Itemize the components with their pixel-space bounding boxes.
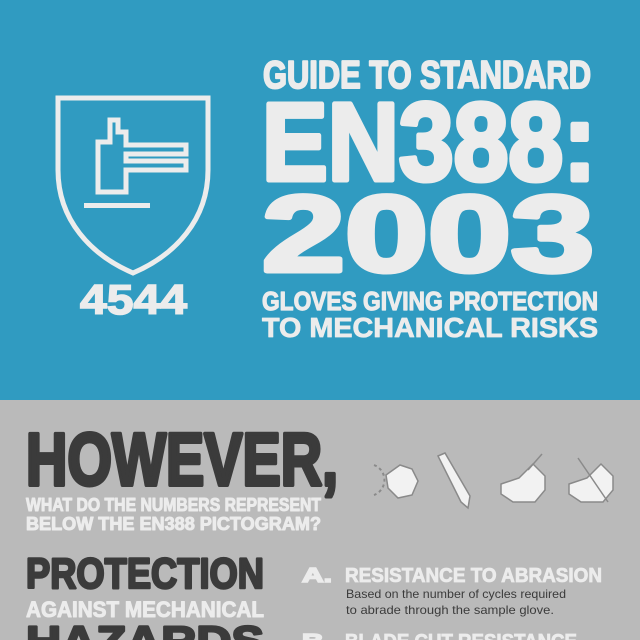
icons: hazards: [374, 453, 613, 508]
subtitle: TO MECHANICAL RISKS: [262, 312, 598, 343]
item A: abrasion: A.: [302, 565, 332, 587]
item A: abrasion: to abrade through the sample glove.: [346, 603, 554, 617]
heading: protection against mechanical hazards: AGAINST MECHANICAL: [26, 597, 264, 622]
icon: tear hand: [501, 454, 545, 502]
title: EN388:: [262, 81, 596, 204]
icon: abrasion fist: [374, 465, 418, 498]
icon: puncture hand: [569, 458, 613, 502]
heading: however: WHAT DO THE NUMBERS REPRESENT: [26, 495, 321, 515]
pictogram number: 4544: [80, 276, 188, 323]
heading: however: HOWEVER,: [26, 418, 338, 501]
title: [262, 54, 596, 294]
icon: blade: [438, 453, 470, 508]
title: 2003: [262, 173, 594, 294]
header panel: [0, 0, 640, 400]
heading: protection against mechanical hazards: [26, 550, 264, 640]
subtitle: GLOVES GIVING PROTECTION: [262, 286, 598, 316]
item A: abrasion: RESISTANCE TO ABRASION: [345, 565, 602, 587]
item A: abrasion: [302, 565, 602, 617]
subtitle: [262, 286, 598, 343]
icon: EN388 shield with fist and hammer: [58, 98, 208, 273]
heading: however: BELOW THE EN388 PICTOGRAM?: [26, 514, 321, 534]
heading: protection against mechanical hazards: PROTECTION: [26, 550, 264, 598]
heading: however: [26, 418, 338, 534]
item A: abrasion: Based on the number of cycles required: [346, 587, 566, 601]
